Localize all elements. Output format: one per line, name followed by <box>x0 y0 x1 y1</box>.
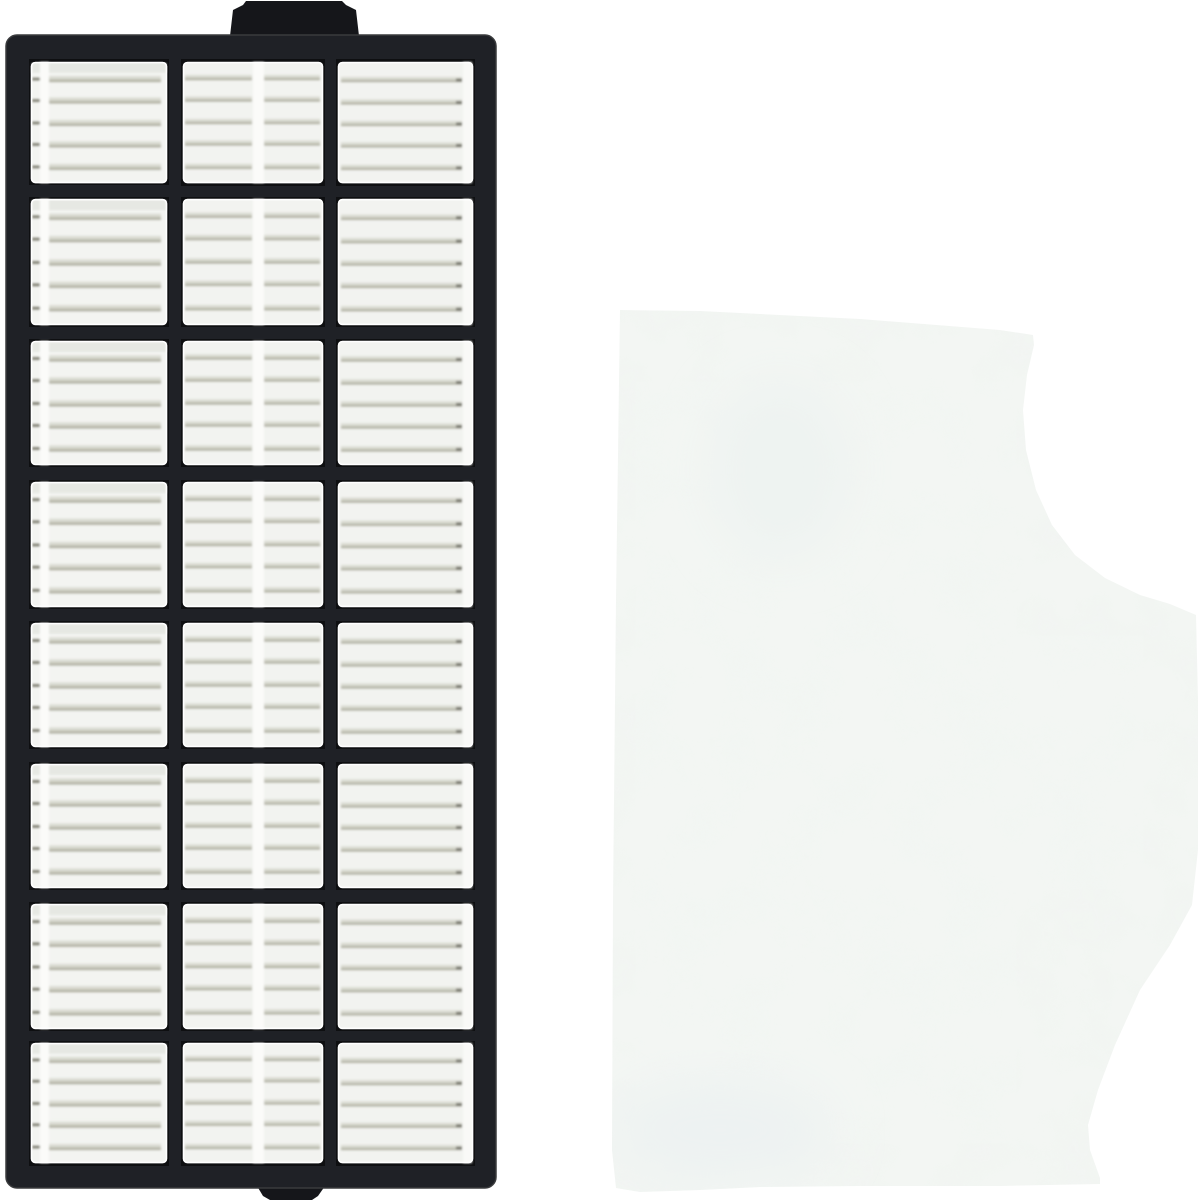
pleated filter cartridge <box>6 1 496 1200</box>
white foam filter pad <box>600 300 1200 1200</box>
filter cells grid <box>29 59 475 1166</box>
row 7 <box>31 904 473 1029</box>
bottom clip tab <box>257 1186 325 1200</box>
row 6 <box>31 764 473 888</box>
row 4 <box>31 482 473 607</box>
row 3 <box>31 341 473 465</box>
row 2 <box>31 199 473 325</box>
row 1 <box>31 62 473 183</box>
row 5 <box>31 623 473 747</box>
top clip tab <box>230 1 359 36</box>
black frame <box>6 35 496 1188</box>
row 8 <box>31 1043 473 1163</box>
